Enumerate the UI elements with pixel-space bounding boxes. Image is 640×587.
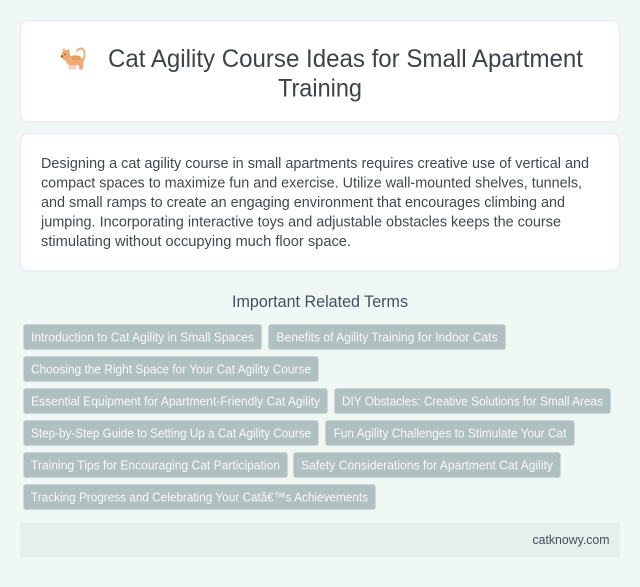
chip: step-by-step xyxy=(24,420,318,446)
panel: title card xyxy=(20,20,620,122)
chip: benefits: Benefits of Agility Training for Indoor Cats xyxy=(276,330,498,344)
chip: safety: Safety Considerations for Apartment Cat Agility xyxy=(301,458,554,472)
text block: intro paragraph: stimulating without occupying much floor space. xyxy=(41,233,351,250)
icon: orange cat xyxy=(61,48,85,70)
heading: important related terms: Important Related Terms xyxy=(232,293,408,311)
chip: safety xyxy=(294,452,560,478)
footer text: site name: catknowy.com xyxy=(532,532,610,547)
chip: fun challenges xyxy=(326,420,574,446)
panel: related term chips xyxy=(24,324,610,510)
chip: essential equipment xyxy=(24,388,328,414)
chip: step-by-step: Step-by-Step Guide to Setting Up a Cat Agility Course xyxy=(31,426,311,440)
chip: DIY obstacles: DIY Obstacles: Creative Solutions for Small Areas xyxy=(342,394,603,408)
chip: introduction: Introduction to Cat Agility in Small Spaces xyxy=(31,330,254,344)
chip: tracking progress xyxy=(24,484,376,510)
chip: training tips xyxy=(24,452,288,478)
chip: tracking progress: Tracking Progress and Celebrating Your Catâ€™s Achievements xyxy=(31,490,368,504)
chip: benefits xyxy=(268,324,506,350)
title: Cat Agility Course Ideas for Small Apartment xyxy=(108,45,583,73)
text block: intro paragraph: compact spaces to maximize fun and exercise. Utilize wall-mounted shelves, tunnels, xyxy=(41,174,582,192)
panel: intro text card xyxy=(20,134,620,271)
text block: intro paragraph xyxy=(40,155,589,250)
text block: intro paragraph: Designing a cat agility course in small apartments requires creative use of vertical and xyxy=(41,155,589,172)
chip: essential equipment: Essential Equipment for Apartment-Friendly Cat Agility xyxy=(31,394,321,408)
text block: intro paragraph: jumping. Incorporating interactive toys and adjustable obstacles keeps the course xyxy=(40,214,561,230)
chip: introduction xyxy=(24,324,262,350)
chip: choosing space: Choosing the Right Space for Your Cat Agility Course xyxy=(31,362,311,376)
title: Training xyxy=(278,74,362,102)
text block: intro paragraph: and small ramps to create an engaging environment that encourages climbing and xyxy=(41,194,565,211)
footer xyxy=(20,523,620,557)
chip: choosing space xyxy=(24,356,318,382)
title xyxy=(108,45,583,102)
chip: training tips: Training Tips for Encouraging Cat Participation xyxy=(31,458,280,472)
chip: fun challenges: Fun Agility Challenges to Stimulate Your Cat xyxy=(334,426,567,440)
chip: DIY obstacles xyxy=(334,388,610,414)
